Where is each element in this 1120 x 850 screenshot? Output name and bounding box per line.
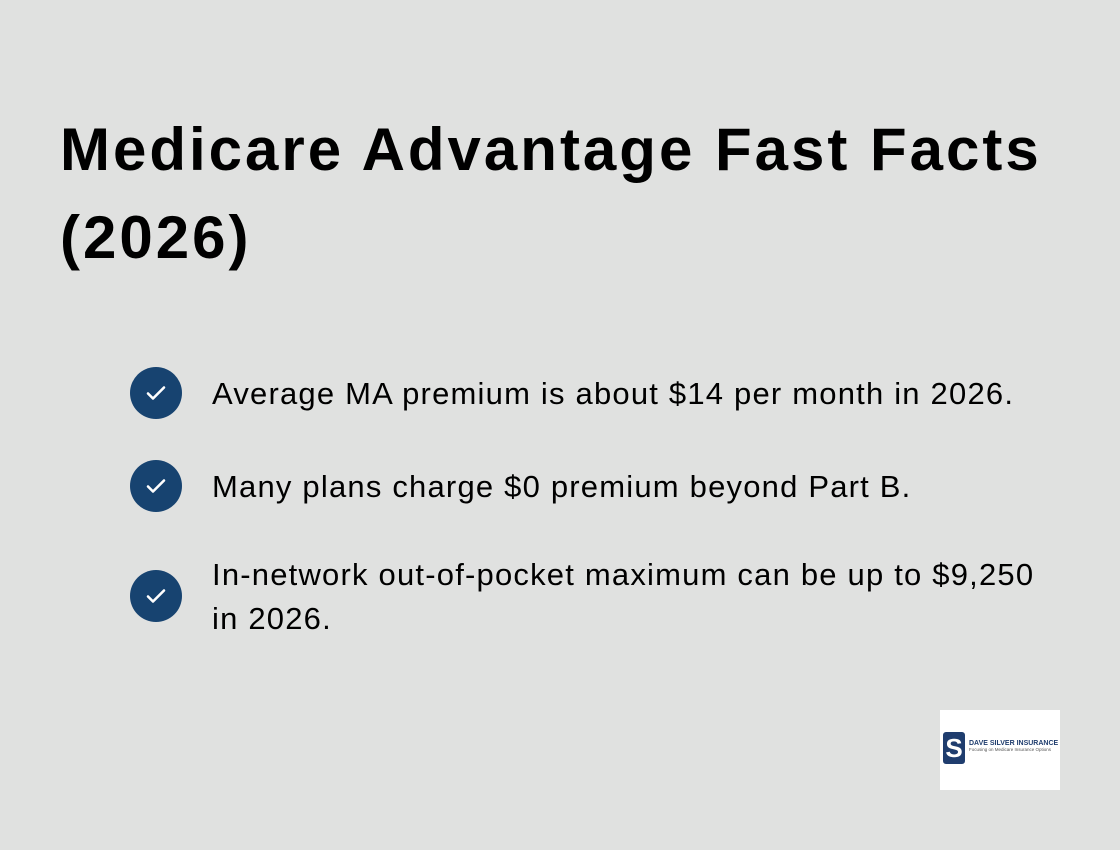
logo text: DAVE SILVER INSURANCE <box>969 740 1058 747</box>
text 3: In-network out-of-pocket maximum can be up to $9,250 in 2026. <box>212 557 1034 636</box>
logo mark: S <box>945 733 963 763</box>
icon: check 2 <box>130 460 182 512</box>
text 1: Average MA premium is about $14 per month in 2026. <box>212 376 1014 411</box>
logo text <box>969 740 1058 752</box>
icon: check 1 <box>130 367 182 419</box>
fact 2 <box>130 460 912 512</box>
title: Medicare Advantage Fast Facts (2026) <box>60 116 1042 271</box>
icon: check 3 <box>130 570 182 622</box>
text 2: Many plans charge $0 premium beyond Part B. <box>212 469 912 504</box>
fact 3 <box>130 557 1034 636</box>
logo text: Focusing on Medicare Insurance Options <box>969 747 1051 752</box>
fact 1 <box>130 367 1014 419</box>
logo <box>940 710 1060 790</box>
